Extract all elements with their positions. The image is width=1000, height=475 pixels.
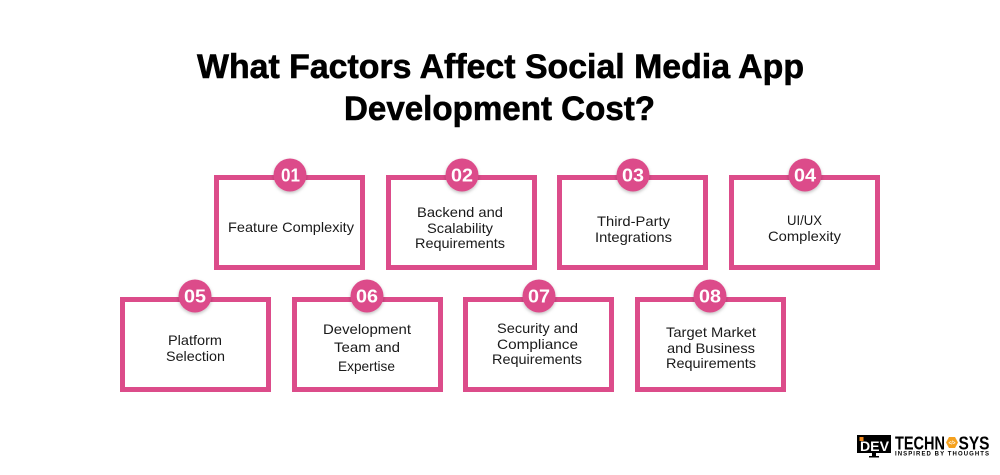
card 02: Backend and Scalability Requirements: Scalability [427,220,493,236]
card 08: Target Market and Business Requirements [638,280,784,390]
card 08: Target Market and Business Requirements: Target Market [666,324,756,340]
card 01: Feature Complexity: Feature Complexity [228,219,354,235]
card 08: Target Market and Business Requirements: 08 [699,286,721,306]
card 01: Feature Complexity: 01 [281,166,300,186]
icon: monitor: DEV [860,438,890,454]
card 06: Development Team and Expertise: Team and [334,339,400,355]
card 03: Third-Party Integrations: 03 [622,166,644,186]
card 07: Security and Compliance Requirements: Compliance [497,336,578,352]
card 07: Security and Compliance Requirements: Requirements [492,351,582,367]
logo wordmark: </> [948,440,956,446]
card 04: UI/UX Complexity: 04 [794,166,816,186]
title: Development Cost? [344,90,655,128]
card 06: Development Team and Expertise [294,280,440,390]
card 02: Backend and Scalability Requirements: Backend and [417,204,503,220]
card 05: Platform Selection: 05 [184,286,206,306]
title [197,48,804,128]
card 08: Target Market and Business Requirements: Requirements [666,355,756,371]
card 04: UI/UX Complexity [732,158,878,268]
card 07: Security and Compliance Requirements: Security and [497,320,578,336]
logo wordmark [895,434,990,458]
logo wordmark: INSPIRED BY THOUGHTS [895,452,989,458]
card 03: Third-Party Integrations: Third-Party [597,213,670,229]
card 02: Backend and Scalability Requirements [388,158,534,268]
card 04: UI/UX Complexity: UI/UX [787,212,823,228]
logo: Dev Technosys [857,434,990,458]
title: What Factors Affect Social Media App [197,48,804,86]
card 05: Platform Selection [122,280,268,390]
card 02: Backend and Scalability Requirements: Requirements [415,235,505,251]
card 01: Feature Complexity [216,158,362,268]
card 07: Security and Compliance Requirements: 07 [528,286,550,306]
card 06: Development Team and Expertise: Development [323,321,411,337]
card 06: Development Team and Expertise: 06 [356,286,378,306]
logo wordmark: SYS [958,434,990,454]
card 02: Backend and Scalability Requirements: 02 [451,166,473,186]
card 05: Platform Selection: Selection [166,348,225,364]
logo wordmark: TECHN [895,434,945,454]
card 04: UI/UX Complexity: Complexity [768,228,841,244]
card 07: Security and Compliance Requirements [466,280,612,390]
card 08: Target Market and Business Requirements: and Business [667,340,755,356]
card 05: Platform Selection: Platform [168,332,222,348]
card 06: Development Team and Expertise: Expertise [338,358,395,374]
card 03: Third-Party Integrations [560,158,706,268]
card 03: Third-Party Integrations: Integrations [595,229,672,245]
